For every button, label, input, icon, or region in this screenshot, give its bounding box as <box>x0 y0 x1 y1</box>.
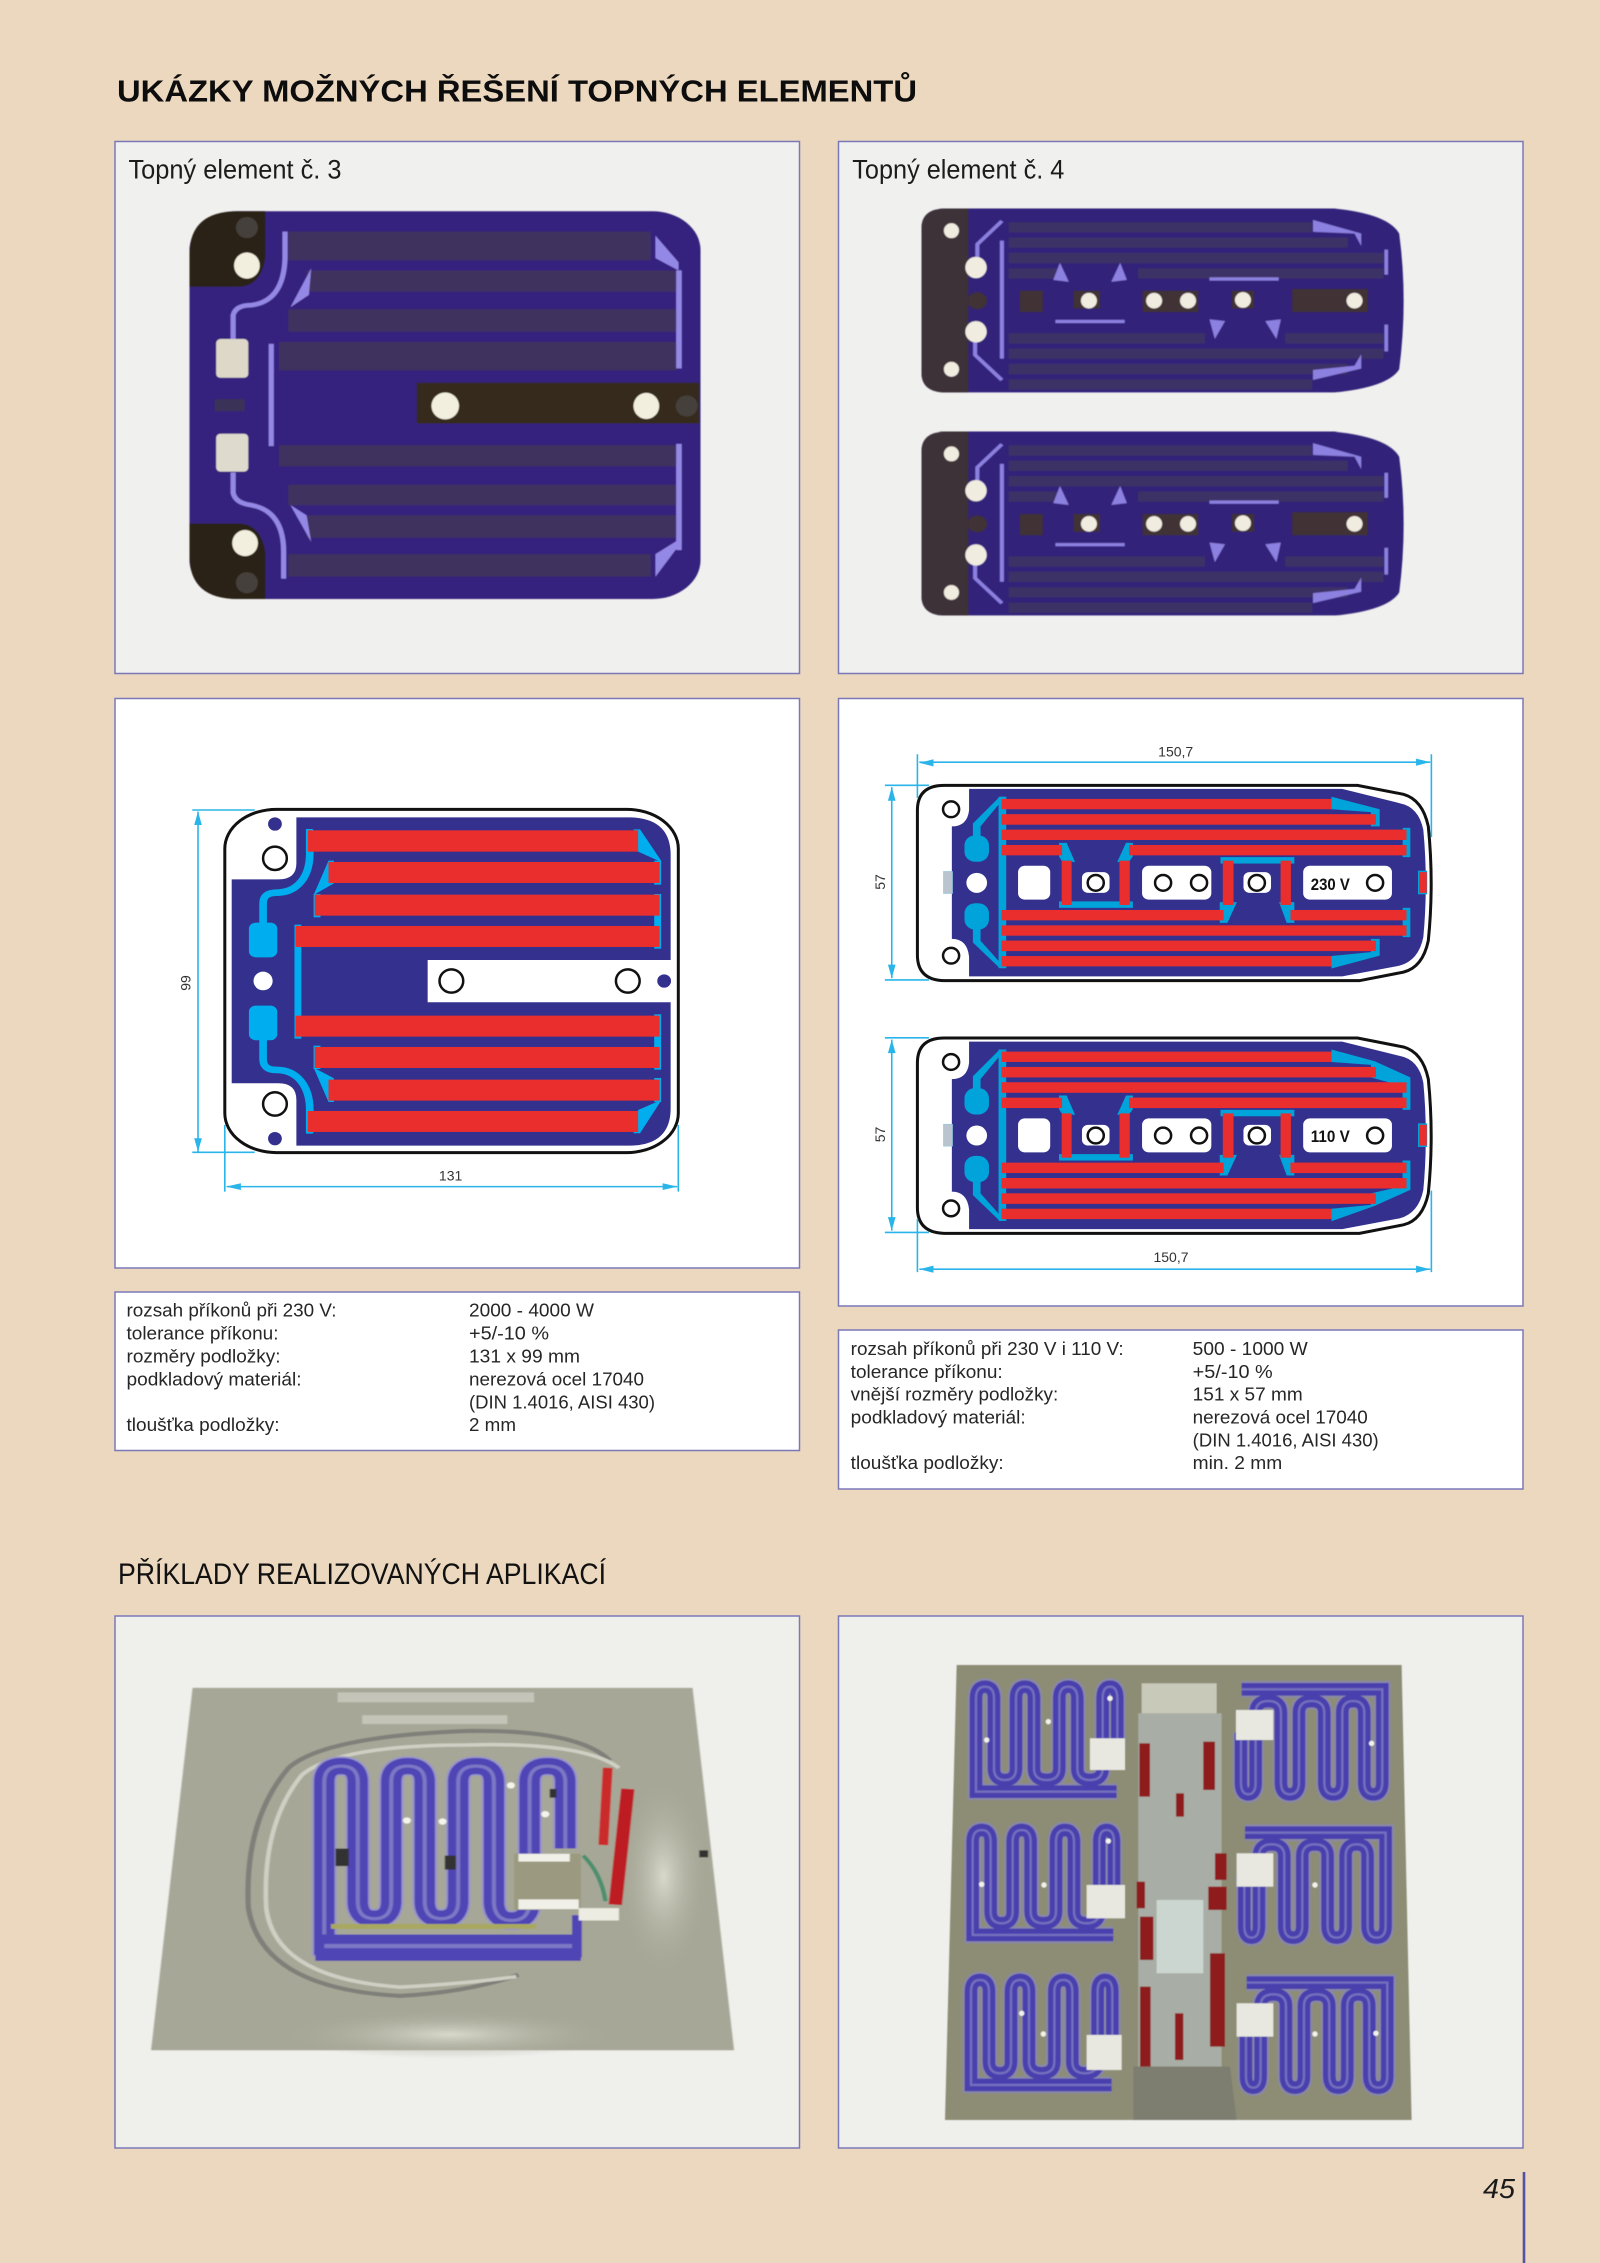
spec values: +5/-10 % <box>469 1323 549 1343</box>
spec values: 500 - 1000 W <box>1193 1339 1308 1359</box>
label: top width 150,7: 150,7 <box>1158 744 1193 760</box>
drawing: element 3 board layout <box>225 809 678 1153</box>
caption: element 3: Topný element č. 3 <box>128 154 342 184</box>
panel: photo of heating element 4 <box>838 142 1523 674</box>
spec labels: tolerance příkonu: <box>126 1323 278 1343</box>
label: 230 V: 230 V <box>1311 875 1350 894</box>
spec labels: vnější rozměry podložky: <box>851 1385 1058 1405</box>
spec values: (DIN 1.4016, AISI 430) <box>469 1392 655 1412</box>
panel: application photo 2 <box>838 1616 1523 2148</box>
panel: photo of heating element 3 <box>115 142 800 674</box>
panel: application photo 1 <box>115 1616 800 2148</box>
label: height 99: 99 <box>178 975 194 991</box>
panel: specification element 4 <box>838 1330 1523 1489</box>
spec values <box>1193 1339 1379 1473</box>
label: width 131: 131 <box>439 1168 462 1184</box>
label: height 57 lower: 57 <box>872 1127 888 1142</box>
page number: 45 <box>1483 2173 1515 2204</box>
spec values: nerezová ocel 17040 <box>469 1369 644 1389</box>
title: UKÁZKY MOŽNÝCH ŘEŠENÍ TOPNÝCH ELEMENTŮ <box>117 70 917 108</box>
page number rule <box>1523 2172 1525 2263</box>
dimension lines: element 3 <box>192 810 678 1192</box>
spec labels: tolerance příkonu: <box>851 1362 1003 1382</box>
drawing: 110 V board layout <box>917 1038 1431 1233</box>
panel: specification element 3 <box>115 1292 800 1450</box>
heading: realized applications: PŘÍKLADY REALIZOVANÝCH APLIKACÍ <box>118 1558 607 1591</box>
caption: element 4: Topný element č. 4 <box>852 154 1064 184</box>
photo: element 4 boards <box>922 209 1404 616</box>
spec labels: tloušťka podložky: <box>126 1415 280 1435</box>
photo: six serpentine heaters on plate <box>945 1665 1412 2120</box>
spec values: 2000 - 4000 W <box>469 1301 594 1321</box>
spec labels: rozsah příkonů při 230 V i 110 V: <box>851 1339 1124 1359</box>
drawing: 230 V board layout <box>917 785 1431 981</box>
panel: element 4 technical drawing <box>838 698 1523 1306</box>
spec values <box>469 1301 655 1435</box>
spec labels: podkladový materiál: <box>851 1408 1026 1428</box>
spec values: +5/-10 % <box>1193 1362 1273 1382</box>
spec values: 151 x 57 mm <box>1193 1385 1303 1405</box>
label: 110 V: 110 V <box>1311 1127 1350 1146</box>
label: height 57 upper: 57 <box>872 874 888 890</box>
spec labels: podkladový materiál: <box>126 1369 302 1389</box>
spec labels: tloušťka podložky: <box>851 1453 1004 1473</box>
spec values: (DIN 1.4016, AISI 430) <box>1193 1430 1379 1450</box>
spec values: 131 x 99 mm <box>469 1346 580 1366</box>
spec labels <box>851 1339 1124 1473</box>
dimension lines: element 4 <box>885 754 1431 1273</box>
panel: element 3 technical drawing <box>115 698 800 1268</box>
spec labels <box>126 1301 336 1435</box>
spec labels: rozměry podložky: <box>126 1346 280 1366</box>
spec values: 2 mm <box>469 1415 516 1435</box>
label: bottom width 150,7: 150,7 <box>1153 1249 1189 1265</box>
spec labels: rozsah příkonů při 230 V: <box>126 1301 336 1321</box>
spec values: min. 2 mm <box>1193 1453 1282 1473</box>
spec values: nerezová ocel 17040 <box>1193 1408 1368 1428</box>
photo: element 3 board <box>190 211 701 599</box>
photo: single serpentine heater on plate <box>151 1688 734 2059</box>
